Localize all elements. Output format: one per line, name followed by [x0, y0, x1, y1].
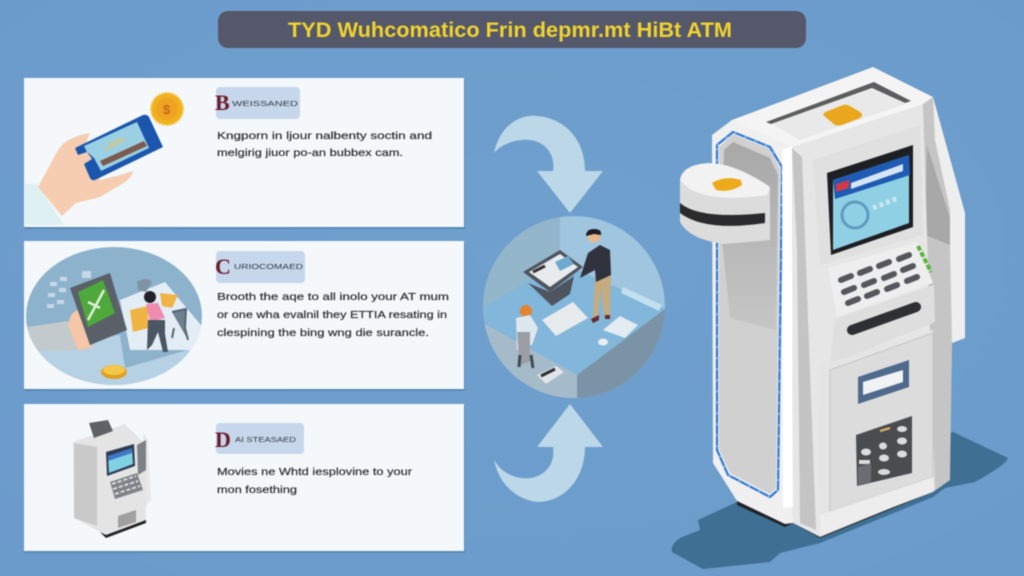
ATM base: [737, 488, 933, 538]
cabinet keypad: [856, 416, 912, 486]
heading chip: B: [215, 90, 230, 115]
ATM screen: [827, 145, 913, 255]
scene: desk and screen: [523, 250, 583, 306]
icon: hand holding phone with coin: [25, 93, 183, 225]
screen housing: [813, 125, 923, 265]
lower cabinet: [818, 330, 933, 537]
arrow: top curved: [494, 116, 603, 213]
large ATM illustration: [680, 67, 965, 538]
heading chip: [215, 251, 305, 283]
icon: small ATM: [73, 420, 151, 538]
text block: [217, 291, 449, 339]
text block: Movies ne Whtd iesplovine to your: [217, 466, 413, 478]
keypad panel: [828, 242, 933, 317]
icon: hand holding phone with coin: $: [163, 102, 171, 117]
text block: mon fosething: [217, 484, 297, 496]
text block: [217, 466, 413, 496]
text block: Brooth the aqe to all inolo your AT mum: [217, 291, 449, 303]
ATM top face: [732, 67, 933, 147]
text block: Kngporn in ljour nalbenty soctin and: [217, 130, 432, 142]
heading chip: C: [215, 254, 231, 279]
title bar: TYD Wuhcomatico Frin depmr.mt HiBt ATM: [288, 19, 732, 42]
heading chip: AI STEASAED: [235, 435, 297, 444]
heading chip: [215, 87, 300, 119]
text block: clespining the bing wng die surancle.: [217, 327, 429, 339]
icon: coin on top: [823, 105, 862, 126]
scene: standing man: [580, 229, 611, 323]
panel: step D, ATM: [24, 404, 465, 553]
panel: step C, tablet: [24, 241, 465, 391]
coin dispenser: [680, 163, 770, 244]
ATM right side: [923, 97, 965, 492]
ATM front face: [792, 103, 935, 537]
heading chip: URIOCOMAED: [234, 262, 304, 271]
receipt label: [858, 360, 909, 404]
text block: melgirig jiuor po-an bubbex cam.: [217, 147, 403, 159]
text block: [217, 130, 432, 159]
icon: dispenser coin: [712, 178, 742, 191]
icon: tablet and seated person in oval: [24, 245, 206, 390]
heading chip: D: [215, 427, 231, 452]
heading chip: [215, 423, 304, 454]
central circle: office scene: [480, 212, 670, 402]
scene: papers on floor: [542, 302, 638, 346]
panel: step B, phone: [24, 78, 465, 229]
ATM side door: [712, 120, 793, 524]
text block: or one wha evalnil they ETTIA resating in: [217, 309, 447, 321]
scene: person seated: [516, 305, 564, 384]
arrow: bottom curved: [494, 404, 603, 502]
heading chip: WEISSANED: [232, 99, 299, 108]
card slot: [830, 285, 935, 365]
ATM ground shadow: [672, 432, 1008, 569]
title bar: [218, 11, 806, 48]
